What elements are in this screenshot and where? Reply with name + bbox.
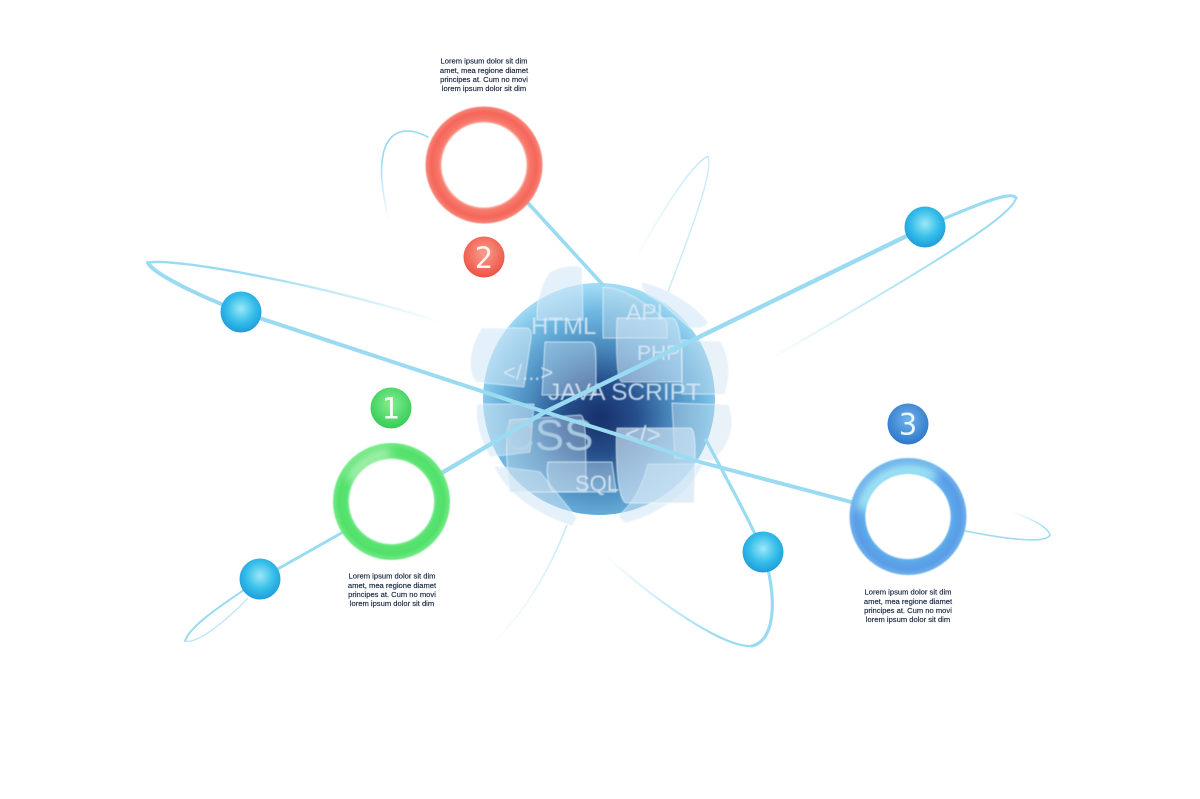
orbit: left loop to lower right bbox=[148, 262, 1050, 540]
code labels: API bbox=[626, 299, 663, 325]
code labels: </...> bbox=[503, 360, 553, 385]
red caption: principes at. Cum no movi bbox=[440, 75, 528, 84]
code labels: </> bbox=[625, 421, 661, 449]
orbit: faint lower left arc bbox=[490, 525, 567, 645]
item 1: green bbox=[333, 388, 450, 608]
icon: orbit ball lower right bbox=[742, 532, 784, 572]
red ring bbox=[426, 106, 542, 224]
item 3: blue bbox=[850, 404, 966, 624]
code labels bbox=[503, 299, 701, 496]
orbit: lower left to upper right bbox=[185, 196, 1016, 641]
icon: orbit ball lower left bbox=[240, 558, 280, 600]
item 2: red bbox=[426, 56, 542, 278]
code labels: SQL bbox=[575, 471, 619, 496]
blue badge bbox=[888, 404, 928, 444]
orbit: red ring connector bbox=[382, 131, 603, 285]
blue badge: 3 bbox=[899, 408, 917, 442]
red caption: amet, mea regione diamet bbox=[440, 66, 529, 75]
green badge: 1 bbox=[382, 392, 400, 426]
green caption: principes at. Cum no movi bbox=[348, 590, 436, 599]
code labels: PHP bbox=[637, 342, 680, 365]
code labels: HTML bbox=[531, 313, 596, 340]
green caption: Lorem ipsum dolor sit dim bbox=[349, 572, 435, 580]
orbit: lower right loop bbox=[605, 440, 772, 646]
sphere body bbox=[483, 283, 715, 515]
green badge bbox=[370, 388, 412, 428]
blue caption: principes at. Cum no movi bbox=[864, 606, 952, 615]
glass panels bbox=[470, 266, 731, 526]
icon: orbit ball upper left bbox=[220, 292, 262, 332]
blue caption: amet, mea regione diamet bbox=[864, 597, 953, 606]
sphere with code panels bbox=[470, 266, 731, 526]
green caption: lorem ipsum dolor sit dim bbox=[350, 599, 434, 608]
blue ring bbox=[850, 458, 966, 575]
red badge bbox=[464, 236, 504, 278]
green ring bbox=[333, 443, 450, 560]
red caption: Lorem ipsum dolor sit dim bbox=[441, 56, 527, 66]
code labels: CSS bbox=[503, 411, 593, 460]
red badge: 2 bbox=[475, 241, 493, 275]
red caption: lorem ipsum dolor sit dim bbox=[442, 84, 526, 93]
icon: orbit ball upper right bbox=[904, 206, 946, 248]
blue caption: Lorem ipsum dolor sit dim bbox=[865, 588, 951, 596]
green caption: amet, mea regione diamet bbox=[348, 581, 437, 590]
blue caption: lorem ipsum dolor sit dim bbox=[866, 615, 950, 624]
code labels: JAVA SCRIPT bbox=[548, 379, 701, 406]
orbit: faint upper right arc bbox=[632, 156, 709, 292]
